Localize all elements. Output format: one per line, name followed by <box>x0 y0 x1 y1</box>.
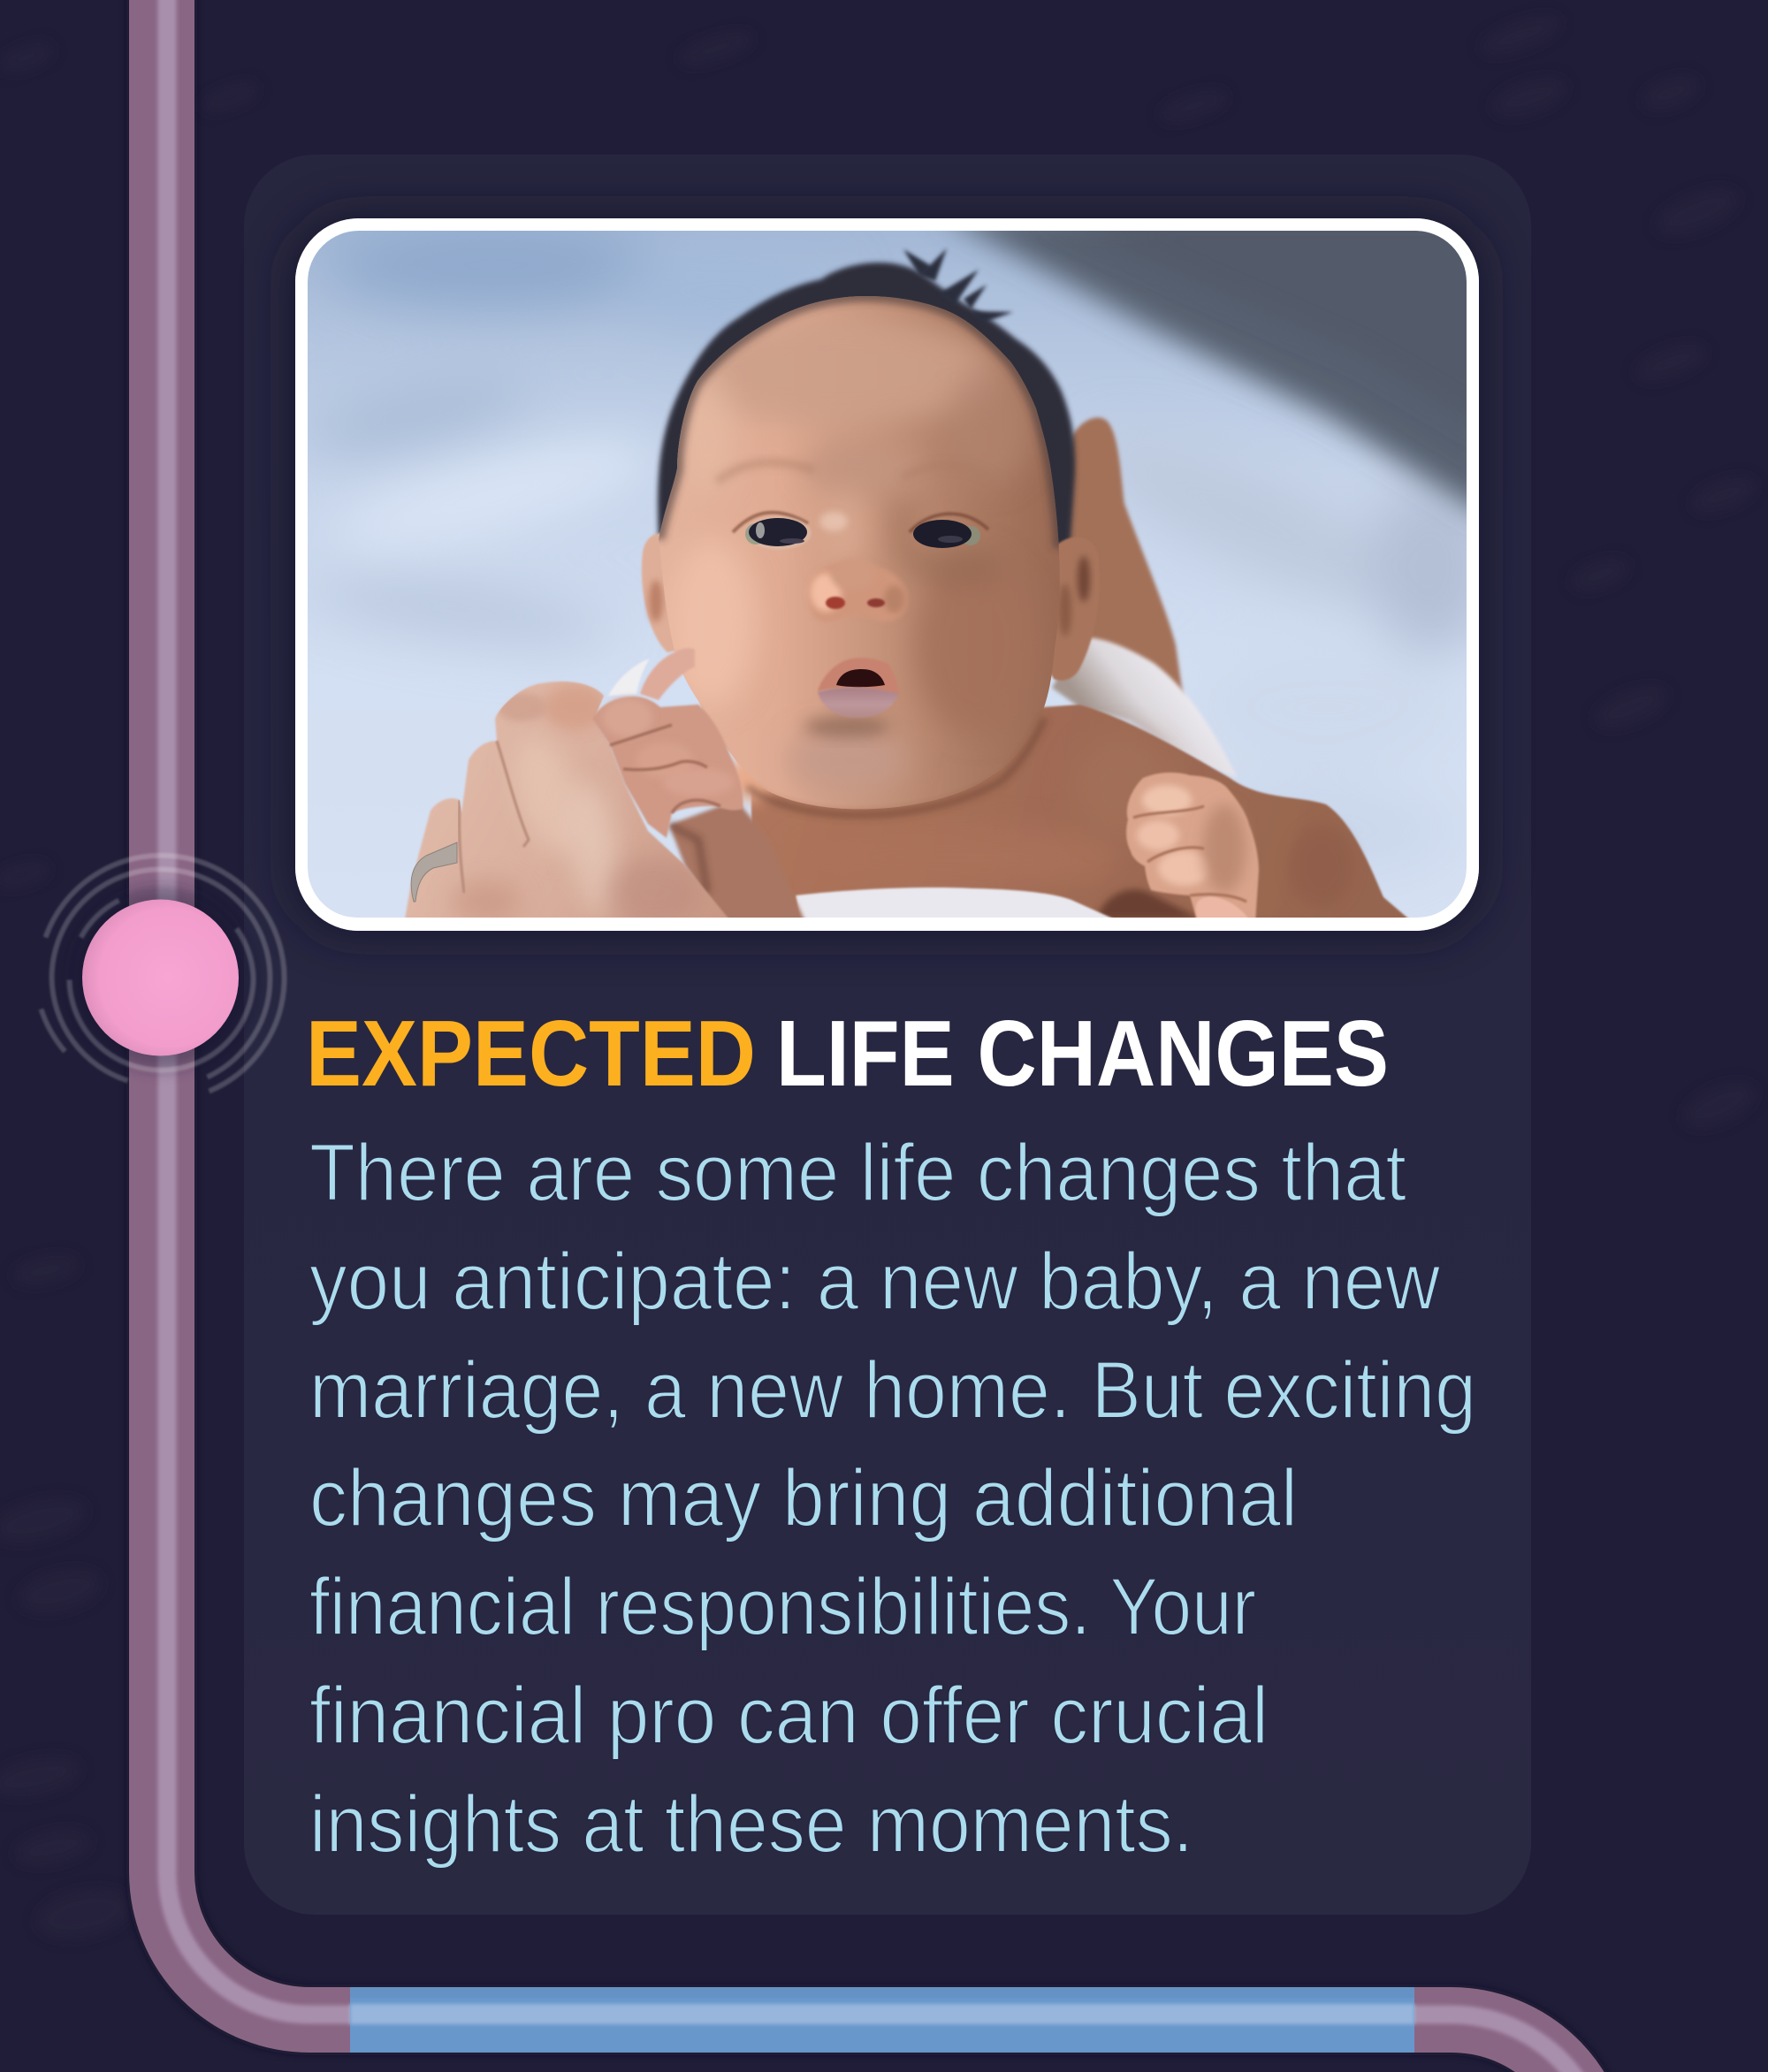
body text: changes may bring additional <box>309 1453 1298 1543</box>
baby body and shoulder <box>727 705 1414 924</box>
marker: pink ball with rings <box>41 856 285 1091</box>
rings <box>41 856 285 1091</box>
body text <box>309 1128 1476 1870</box>
heading: EXPECTED <box>306 1002 756 1106</box>
photo background bedding <box>298 212 1494 924</box>
image shadow <box>285 210 1489 941</box>
mouth <box>818 658 899 718</box>
heading: LIFE CHANGES <box>776 1002 1389 1106</box>
parent's thumb under baby hand <box>669 800 806 924</box>
photo frame border <box>301 225 1473 925</box>
baby face <box>645 283 1078 822</box>
baby fist right <box>1126 773 1259 924</box>
photo: baby held by parent's hands <box>295 212 1494 931</box>
towel at bottom <box>795 886 1114 918</box>
body text: financial pro can offer crucial <box>309 1671 1269 1761</box>
parent's hand <box>405 682 729 928</box>
left eye <box>733 513 812 550</box>
body text: insights at these moments. <box>309 1779 1193 1870</box>
nose <box>808 512 907 622</box>
ring <box>411 842 457 902</box>
eyebrows <box>717 462 1007 485</box>
towel at shoulder <box>1052 637 1238 778</box>
body text: marriage, a new home. But exciting <box>309 1345 1476 1436</box>
baby ear left <box>640 532 674 653</box>
body text: financial responsibilities. Your <box>309 1562 1256 1652</box>
parent's hand behind head <box>1067 415 1185 695</box>
body text: you anticipate: a new baby, a new <box>309 1237 1441 1327</box>
panel: card background <box>244 155 1531 1915</box>
heading <box>306 1002 1389 1106</box>
jaw shadow <box>747 718 1045 815</box>
baby ear right <box>1051 537 1093 682</box>
hair <box>658 248 1075 552</box>
body text: There are some life changes that <box>309 1128 1406 1218</box>
blue tube segment <box>350 1987 1414 2053</box>
baby hand holding finger <box>592 648 743 838</box>
right eye <box>910 514 988 548</box>
ball <box>82 900 239 1055</box>
soft hairline <box>659 296 1059 548</box>
